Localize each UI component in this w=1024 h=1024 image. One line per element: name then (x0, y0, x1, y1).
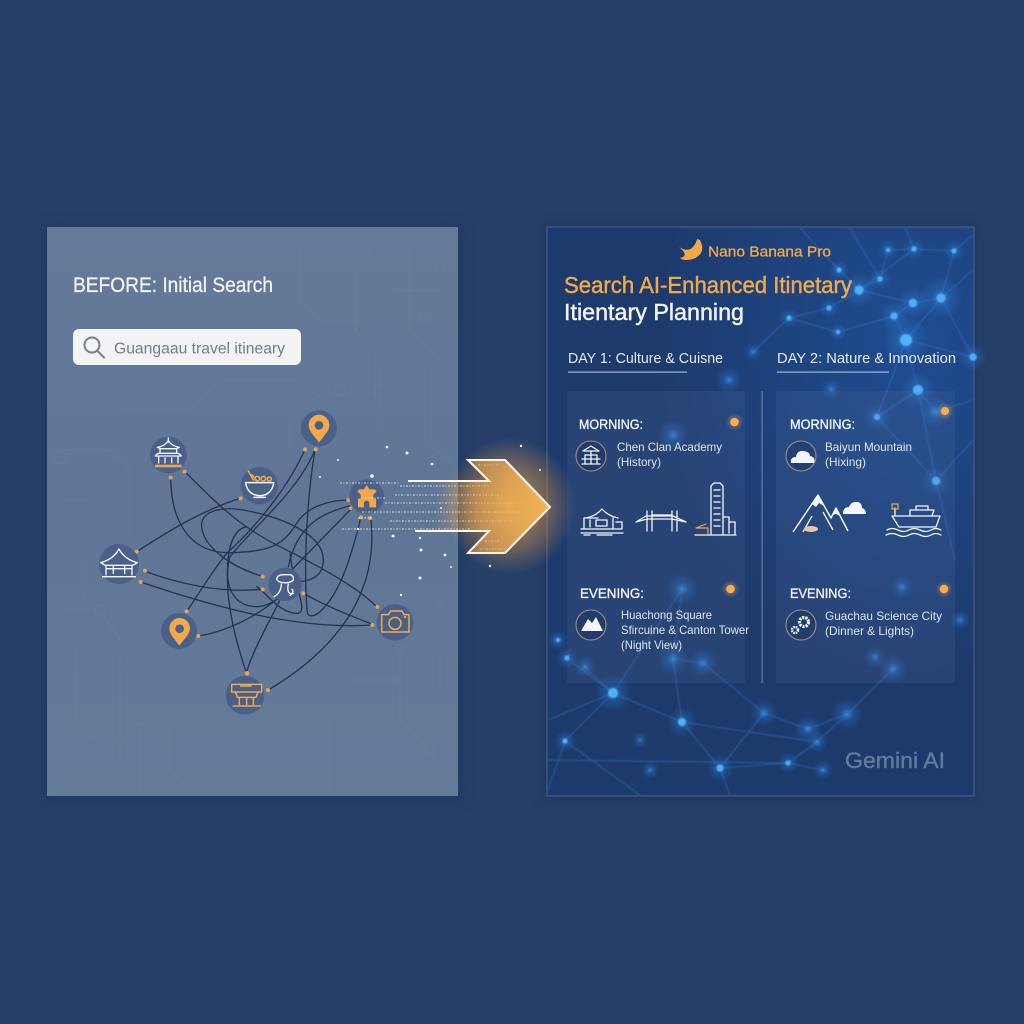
text: Huachong Square: Huachong Square (621, 608, 712, 622)
icon: magnifier (84, 338, 104, 358)
text: Baiyun Mountain: (Hixing) (825, 455, 866, 469)
data stream (340, 465, 535, 549)
search box (73, 329, 301, 365)
node: map pin lower (161, 613, 197, 649)
text: Chen Clan Academy: (History) (617, 455, 661, 469)
orange connector tips (135, 447, 379, 692)
title: Search AI-Enhanced Itinetary (564, 272, 852, 298)
day 2 evening: EVENING: (790, 586, 851, 601)
icon: gears (786, 610, 816, 640)
neural network background (548, 228, 987, 795)
icon: tower skyline (695, 483, 736, 535)
day 1 heading: DAY 1: Culture & Cuisne (568, 351, 723, 367)
icon: peaks (576, 610, 606, 640)
node: hall (99, 544, 139, 584)
search query text: Guangaau travel itineary (114, 340, 285, 358)
node: central tangled icon (268, 568, 302, 601)
node: camera (377, 604, 413, 641)
icon: cloud (843, 502, 866, 514)
icon: bridge (636, 511, 686, 531)
text: Science City: (Dinner & Lights) (825, 624, 914, 638)
text: Science City: Guachau Science City (825, 609, 942, 623)
watermark: Gemini AI: Gemini AI (845, 748, 945, 773)
icon: boat (886, 504, 941, 536)
orange status dot (726, 413, 744, 431)
day 1 and day 2 cards (567, 391, 955, 683)
day 2 heading: DAY 2: Nature & Innovation (777, 351, 956, 367)
orange status dot (935, 580, 953, 598)
day 1 evening: EVENING: (580, 586, 644, 601)
day 1 morning (576, 413, 744, 535)
day 2 morning (786, 402, 954, 536)
panel: before (44, 226, 462, 802)
tangled connection lines (137, 449, 377, 690)
node: pagoda (150, 437, 187, 473)
text: Huachong Square: Sfircuine & Canton Tower (621, 623, 749, 637)
orange status dot (722, 580, 740, 598)
node: map pin top (301, 410, 337, 446)
particle dust (319, 445, 541, 596)
text: Huachong Square (621, 608, 749, 652)
text: Chen Clan Academy (617, 440, 722, 469)
icon: academy (576, 441, 606, 471)
node: gate (226, 676, 264, 715)
brand: Nano Banana Pro (679, 239, 831, 260)
node: orange shrine (349, 479, 384, 514)
icon: cloud mountain (786, 441, 816, 471)
text: Baiyun Mountain (825, 440, 912, 469)
heading: before: BEFORE: Initial Search (73, 274, 273, 297)
text: Chen Clan Academy: Chen Clan Academy (617, 440, 722, 454)
day 1 evening (576, 580, 749, 652)
panel: arrow glow (444, 438, 576, 574)
title (564, 272, 852, 325)
day 2 morning: MORNING: (790, 417, 855, 432)
text: Baiyun Mountain: Baiyun Mountain (825, 440, 912, 454)
brand: Nano Banana Pro: Nano Banana Pro (708, 244, 831, 260)
orange status dot (936, 402, 954, 420)
icon: traditional hall (581, 509, 623, 535)
node: noodle bowl (241, 467, 278, 504)
icon: mountains (793, 495, 848, 532)
title: Itientary Planning (564, 299, 744, 325)
text: Huachong Square: (Night View) (621, 638, 682, 652)
network of tangled routes (99, 410, 413, 715)
text: Science City (825, 609, 942, 638)
arrow (408, 460, 550, 553)
icon: banana (679, 239, 702, 260)
panel: after (544, 226, 978, 802)
day 1 morning: MORNING: (579, 417, 643, 432)
day 2 evening (786, 580, 953, 640)
